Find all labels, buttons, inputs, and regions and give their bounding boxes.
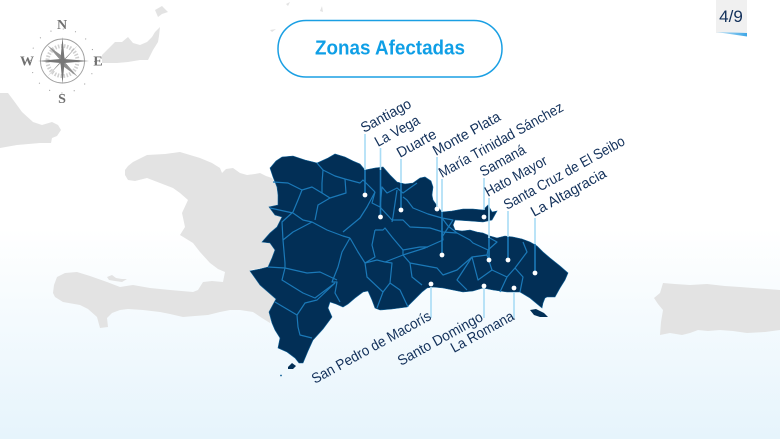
island: Saona: [530, 309, 548, 317]
map: Dominican Republic: [250, 154, 568, 376]
location labels: Santo Domingo: [395, 309, 486, 369]
location labels: [309, 96, 628, 387]
island: Beata: [288, 363, 296, 369]
location labels: Monte Plata: [430, 109, 504, 159]
island: small northern cay: [155, 6, 168, 17]
compass letters: S: [58, 92, 66, 107]
page counter: [716, 0, 747, 36]
location labels: Duarte: [394, 127, 440, 161]
location labels: La Altagracia: [528, 165, 610, 220]
neighbouring islands in grey: [0, 2, 780, 335]
province borders: [268, 163, 527, 338]
island: Haiti: [53, 152, 282, 328]
islet: [280, 375, 282, 376]
counter accent: [716, 32, 747, 36]
location labels: Samaná: [477, 142, 529, 180]
leaders outside the map: [365, 134, 535, 318]
compass letters: [20, 18, 103, 107]
counter text: 4/9: [719, 7, 743, 26]
location labels: San Pedro de Macorís: [309, 309, 434, 387]
location labels: Santiago: [358, 96, 414, 137]
compass letters: E: [93, 54, 103, 70]
leader lines: [365, 134, 535, 318]
country shape: [250, 154, 568, 363]
island: small cays off Haiti: [107, 275, 127, 282]
compass rings: [30, 29, 94, 93]
island: Puerto Rico: [654, 283, 780, 335]
compass letters: N: [57, 18, 67, 33]
location labels: La Romana: [448, 308, 518, 356]
location labels: Hato Mayor: [482, 153, 550, 200]
leaders inside the map: [365, 170, 535, 273]
island: Cuba east tip: [0, 93, 61, 148]
compass cardinal points: [38, 37, 89, 84]
pill outline: [278, 20, 502, 77]
faint specks behind title: [270, 2, 323, 32]
title text: Zonas Afectadas: [315, 38, 465, 60]
island: northern landmass: [102, 27, 160, 63]
title pill: [278, 20, 502, 77]
counter tab: [716, 0, 747, 33]
compass letters: W: [20, 54, 34, 70]
location labels: Santa Cruz de El Seibo: [501, 134, 628, 213]
location labels: María Trinidad Sánchez: [436, 100, 566, 181]
compass diagonal points: [47, 45, 78, 77]
location labels: La Vega: [372, 112, 424, 150]
location dots: [363, 193, 537, 290]
compass rose: [20, 18, 103, 107]
